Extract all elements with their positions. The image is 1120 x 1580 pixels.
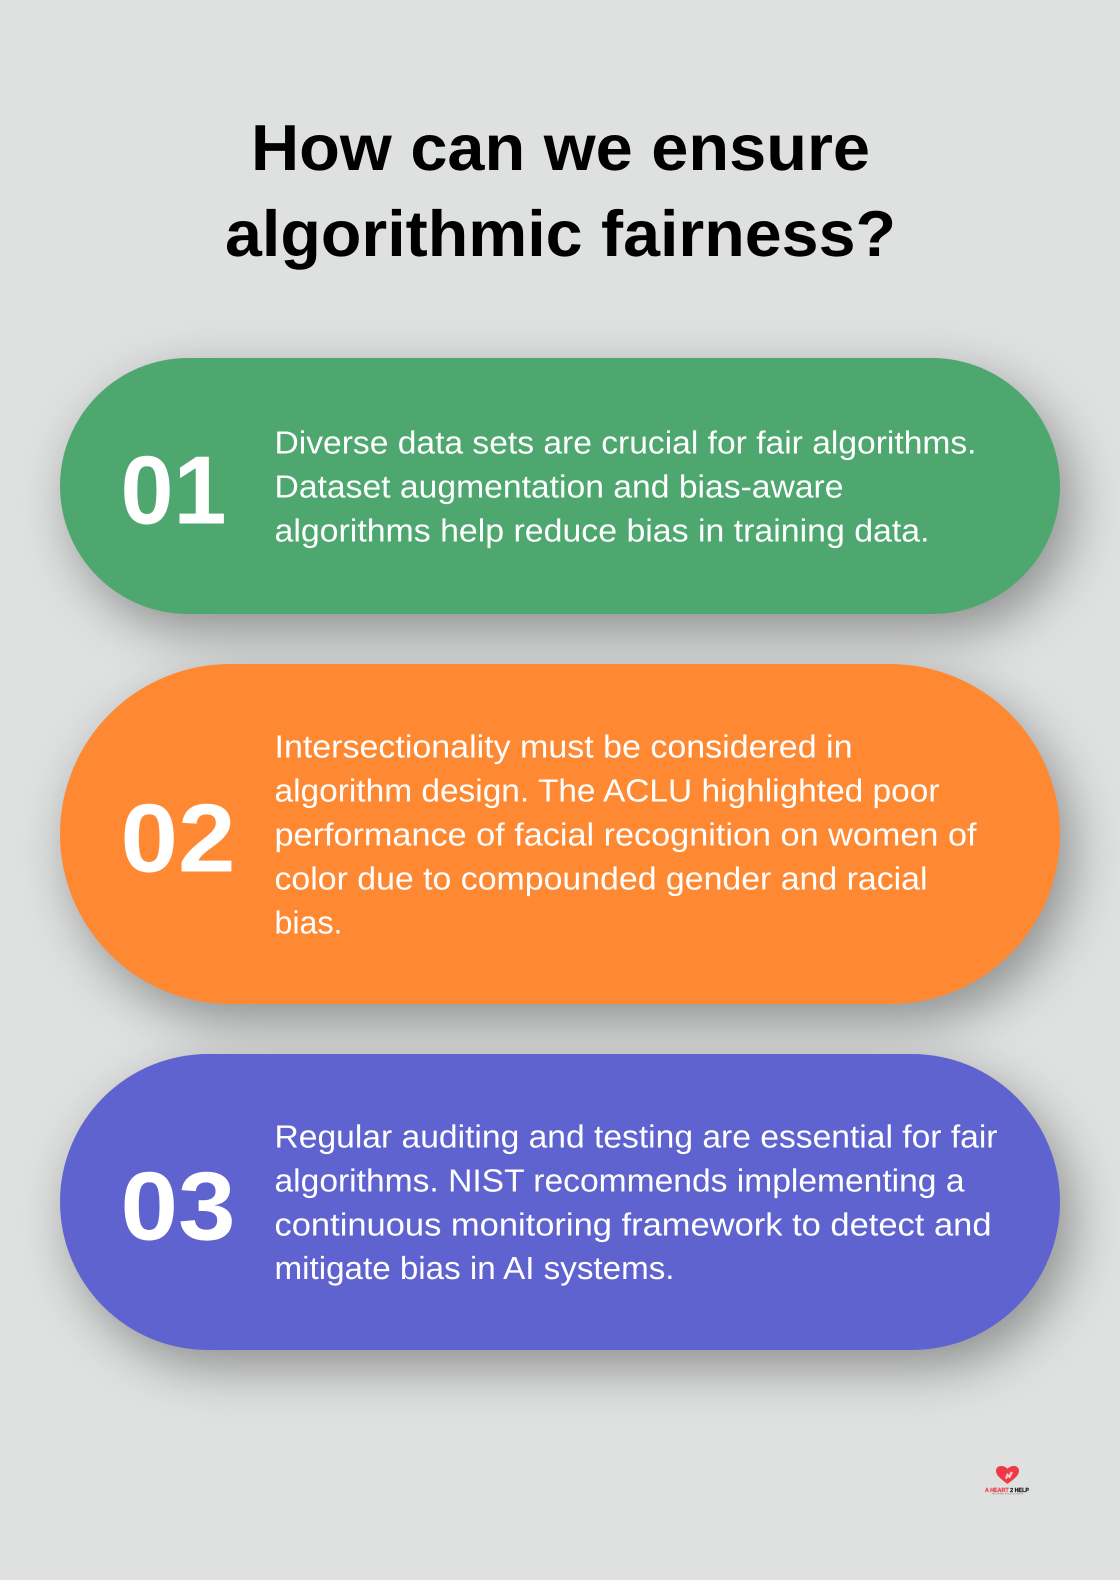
text block: step 03: mitigate bias in AI systems.: [274, 1250, 674, 1286]
number 02: 02: [120, 784, 236, 892]
text block: step 02: performance of facial recognition on women of: [274, 816, 977, 852]
text block: step 01: algorithms help reduce bias in training data.: [274, 513, 930, 549]
title: How can we ensure: [251, 111, 870, 184]
panel: step 03 auditing and testing: [60, 1054, 1060, 1350]
text block: step 03: algorithms. NIST recommends implementing a: [274, 1162, 965, 1198]
text block: step 03: Regular auditing and testing are essential for fair: [274, 1118, 998, 1154]
text block: step 01: [274, 425, 976, 549]
text block: step 02: Intersectionality must be considered in: [274, 728, 852, 764]
logo wordmark: A HEART 2 HELP: [985, 1487, 1029, 1494]
logo: A Heart 2 Help: [985, 1466, 1029, 1496]
text block: step 01: Diverse data sets are crucial for fair algorithms.: [274, 425, 976, 461]
number 01: 01: [120, 436, 226, 544]
text block: step 02: algorithm design. The ACLU highlighted poor: [274, 772, 940, 808]
title: algorithmic fairness?: [225, 197, 896, 270]
icon: red heart: [996, 1466, 1019, 1484]
logo tagline: HELPING EACH OTHER: [992, 1493, 1023, 1496]
text block: step 02: [274, 728, 977, 940]
text block: step 03: continuous monitoring framework to detect and: [274, 1206, 992, 1242]
text block: step 01: Dataset augmentation and bias-aware: [274, 469, 844, 505]
text block: step 02: bias.: [274, 904, 342, 940]
title: [225, 111, 896, 270]
number 03: 03: [120, 1152, 236, 1260]
text block: step 02: color due to compounded gender and racial: [274, 860, 927, 896]
panel: step 02 intersectionality: [60, 664, 1060, 1004]
panel: step 01 diverse data sets: [60, 358, 1060, 614]
text block: step 03: [274, 1118, 998, 1286]
